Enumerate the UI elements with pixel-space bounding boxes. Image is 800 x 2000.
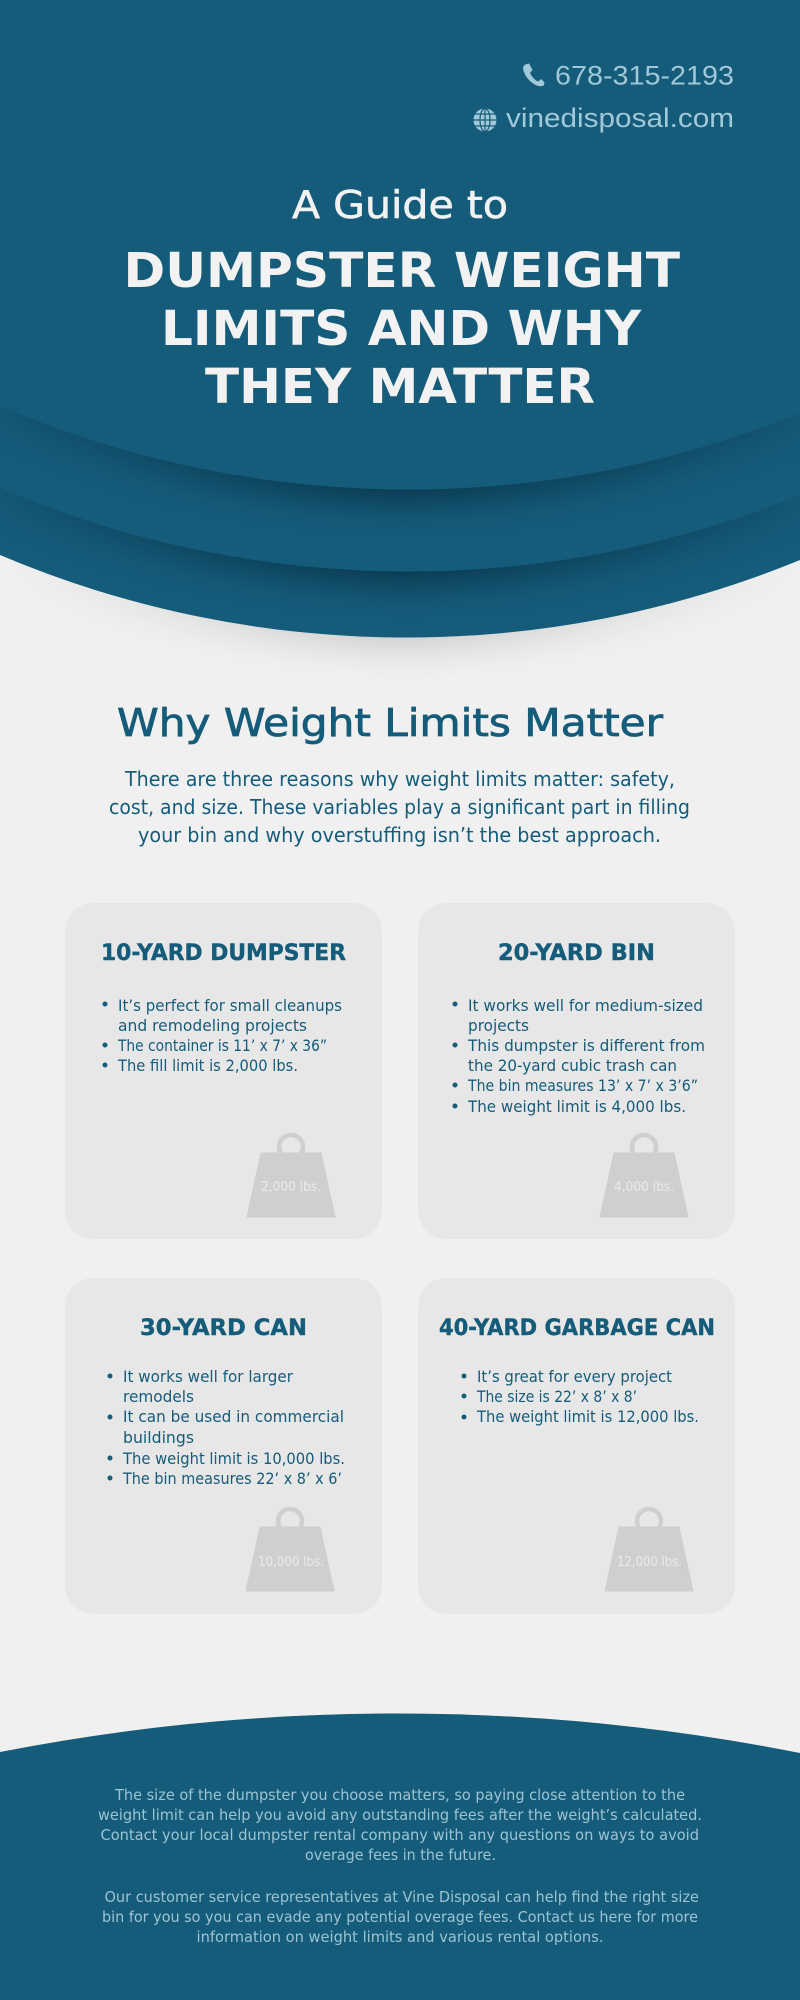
bullet list: The weight limit is 12,000 lbs.	[476, 1407, 699, 1426]
bullet list: It works well for larger	[123, 1367, 293, 1386]
card heading: 10-YARD DUMPSTER	[101, 941, 346, 966]
icon: weight 10,000 lbs: 10,000 lbs.	[258, 1555, 324, 1570]
icon: weight 12,000 lbs	[605, 1509, 693, 1591]
footer paragraph 2: bin for you so you can evade any potential overage fees. Contact us here for more	[102, 1908, 698, 1926]
title	[124, 183, 680, 415]
bullet list: the 20-yard cubic trash can	[468, 1056, 677, 1075]
card heading: 40-YARD GARBAGE CAN	[439, 1316, 715, 1341]
panel: 20-yard bin	[418, 903, 735, 1239]
title: kicker: A Guide to	[292, 183, 508, 227]
footer paragraph 2	[102, 1888, 699, 1946]
icon: weight 2,000 lbs	[247, 1135, 335, 1217]
panel: 40-yard garbage can	[418, 1278, 735, 1614]
bullet list: buildings	[123, 1428, 194, 1447]
footer paragraph 1	[98, 1786, 702, 1864]
bullet list: The fill limit is 2,000 lbs.	[117, 1056, 298, 1075]
icon: phone	[523, 64, 545, 86]
footer paragraph 2: Our customer service representatives at Vine Disposal can help find the right size	[104, 1888, 699, 1906]
icon: weight 4,000 lbs	[600, 1135, 688, 1217]
footer paragraph 1: overage fees in the future.	[305, 1846, 496, 1864]
bullet list: It’s great for every project	[477, 1367, 672, 1386]
title: main heading: DUMPSTER WEIGHT	[124, 243, 680, 299]
contact: phone: 678-315-2193	[555, 60, 734, 90]
icon: weight 4,000 lbs: 4,000 lbs.	[614, 1180, 674, 1195]
card heading: 20-YARD BIN	[498, 941, 655, 966]
intro paragraph: There are three reasons why weight limits matter: safety,	[124, 767, 675, 791]
panel: 10-yard dumpster	[65, 903, 382, 1239]
bullet list: It works well for medium-sized	[468, 996, 703, 1015]
bullet list: The bin measures 13’ x 7’ x 3’6”	[467, 1076, 698, 1095]
card heading: 30-YARD CAN	[140, 1316, 307, 1341]
icon: globe	[474, 108, 496, 132]
header banner with layered curves	[0, 0, 800, 646]
section heading: Why Weight Limits Matter	[117, 701, 663, 745]
bullet list: It’s perfect for small cleanups	[118, 996, 342, 1015]
bullet list	[102, 996, 342, 1075]
bullet list	[462, 1367, 699, 1426]
intro paragraph: cost, and size. These variables play a significant part in filling	[109, 795, 690, 819]
bullet list: This dumpster is different from	[467, 1036, 705, 1055]
bullet list	[108, 1367, 345, 1488]
bullet list: projects	[468, 1016, 529, 1035]
footer paragraph 1: Contact your local dumpster rental company with any questions on ways to avoid	[100, 1826, 699, 1844]
bullet list: and remodeling projects	[118, 1016, 307, 1035]
footer paragraph 1: The size of the dumpster you choose matters, so paying close attention to the	[114, 1786, 685, 1804]
intro paragraph	[109, 767, 690, 847]
footer paragraph 1: weight limit can help you avoid any outstanding fees after the weight’s calculated.	[98, 1806, 702, 1824]
bullet list	[452, 996, 705, 1116]
icon: weight 12,000 lbs: 12,000 lbs.	[617, 1555, 682, 1570]
panel: 30-yard can	[65, 1278, 382, 1614]
contact: website: vinedisposal.com	[506, 103, 734, 133]
title: main heading: LIMITS AND WHY	[161, 301, 642, 357]
icon: weight 2,000 lbs: 2,000 lbs.	[261, 1180, 321, 1195]
bullet list: The weight limit is 4,000 lbs.	[467, 1097, 686, 1116]
intro paragraph: your bin and why overstuffing isn’t the best approach.	[138, 823, 661, 847]
bullet list: The container is 11’ x 7’ x 36”	[117, 1036, 327, 1055]
bullet list: The weight limit is 10,000 lbs.	[122, 1449, 345, 1468]
footer paragraph 2: information on weight limits and various rental options.	[196, 1928, 604, 1946]
bullet list: It can be used in commercial	[123, 1407, 344, 1426]
bullet list: remodels	[123, 1387, 194, 1406]
footer panel	[0, 1713, 800, 2000]
icon: weight 10,000 lbs	[246, 1509, 334, 1591]
title: main heading: THEY MATTER	[205, 359, 595, 415]
bullet list: The size is 22’ x 8’ x 8’	[476, 1387, 637, 1406]
bullet list: The bin measures 22’ x 8’ x 6’	[122, 1469, 342, 1488]
title: main heading	[124, 243, 680, 415]
